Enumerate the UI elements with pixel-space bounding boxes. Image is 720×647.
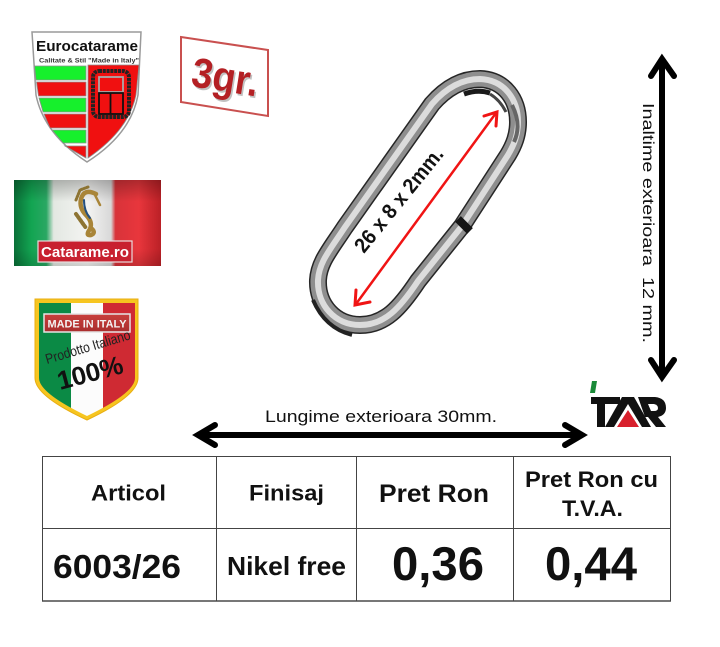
logo: Catarame.ro flag: Catarame.ro [41, 245, 129, 261]
logo stripes [34, 66, 86, 158]
label: exterior height: Inaltime exterioara 12 mm. [639, 103, 656, 343]
weight badge: 3gr.: 3gr. [190, 50, 264, 107]
ring notch [458, 219, 470, 231]
logo: Catarame.ro flag [14, 180, 161, 266]
horizontal arrow: length [198, 425, 582, 445]
table: prices [42, 456, 671, 601]
dimension label: 26 x 8 x 2mm.: 26 x 8 x 2mm. [350, 143, 448, 257]
label: Made in Italy [44, 314, 130, 332]
ring shadow detail [464, 91, 490, 94]
cell: price with VAT: 0,44 [545, 537, 637, 590]
header: Articol: Articol [91, 480, 166, 506]
table grid [42, 456, 671, 601]
header: Pret Ron cu T.V.A.: T.V.A. [562, 496, 623, 521]
badge: Made in Italy shield [35, 299, 138, 423]
weight badge: 3gr. [181, 37, 268, 116]
text: 100%: 100% [54, 349, 126, 396]
header: Pret Ron: Pret Ron [379, 480, 489, 508]
weight badge: 3gr.: 3gr. [189, 48, 262, 105]
logo heading: Eurocatarame: Eurocatarame [36, 38, 138, 55]
label: Catarame.ro [38, 241, 132, 262]
dimension arrow: red [355, 112, 497, 305]
vertical arrow: height [651, 59, 674, 377]
text: Prodotto Italiano: Prodotto Italiano [43, 326, 132, 367]
logo red field [88, 65, 139, 158]
header: Pret Ron cu T.V.A.: Pret Ron cu [525, 467, 658, 492]
product photo: metal ring [313, 79, 518, 335]
icon: seahorse [76, 187, 100, 235]
cell: article code: 6003/26 [53, 548, 181, 585]
logo buckle icon [93, 71, 129, 117]
cell: finish: Nikel free [227, 551, 346, 581]
logo: ITAR [590, 381, 666, 427]
badge: Made in Italy shield: MADE IN ITALY [48, 318, 127, 330]
label: exterior length: Lungime exterioara 30mm. [265, 408, 497, 426]
header: Finisaj: Finisaj [249, 480, 324, 506]
logo tagline: Calitate & Stil "Made in Italy" [39, 58, 139, 64]
cell: price: 0,36 [392, 537, 484, 590]
logo: Eurocatarame shield [32, 32, 141, 162]
